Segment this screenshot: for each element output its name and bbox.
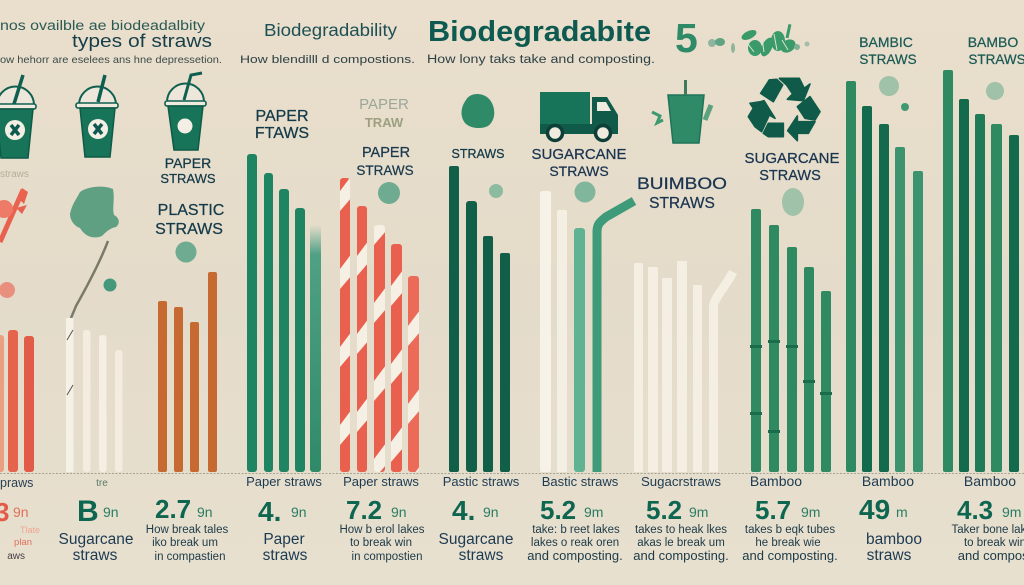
- caption: faint straws: straws: [0, 169, 29, 180]
- column 1 stats: plan: [14, 537, 32, 548]
- label: plastic straws: PLASTIC: [158, 202, 224, 219]
- column 2 stats: [59, 478, 133, 564]
- label: sugarcane straws: STRAWS: [549, 163, 609, 179]
- label: paper ftaws: PAPER: [255, 108, 309, 125]
- column 9 stats: [742, 473, 838, 563]
- header: left: [0, 18, 222, 66]
- column 10 stats: bamboo: [866, 531, 922, 548]
- column 5 stats: Paper straws: [343, 474, 419, 489]
- column 8 stats: 9m: [689, 504, 708, 520]
- column 6 stats: 9n: [483, 504, 499, 520]
- column 7 stats: 9m: [584, 504, 603, 520]
- column 11 stats: 9m: [1002, 504, 1021, 520]
- number five: 5: [675, 15, 698, 61]
- label: bambic straws: STRAWS: [859, 52, 917, 67]
- label: bumboo straws: STRAWS: [649, 195, 715, 212]
- column 7 stats: 5.2: [540, 495, 576, 525]
- label: sugarcane straws: SUGARCANE: [744, 150, 840, 167]
- header: left: types of straws: [72, 31, 212, 51]
- badge: [879, 76, 899, 96]
- column 9 stats: 5.7: [755, 495, 791, 525]
- column 7 stats: take: b reet lakes: [532, 524, 620, 536]
- column 4 stats: 9n: [291, 504, 307, 520]
- main title: How lony taks take and composting.: [427, 54, 655, 66]
- column 10 stats: Bamboo: [862, 473, 914, 489]
- header: centre-left: How blendilll d compostions.: [240, 54, 415, 66]
- column 11 stats: [952, 473, 1024, 563]
- leaves decoration: [708, 24, 810, 58]
- icon: green leaf: [70, 187, 119, 237]
- header: centre-left: Biodegradability: [264, 20, 397, 40]
- badge: [986, 82, 1004, 100]
- column 10 stats: 49: [859, 494, 890, 525]
- straw group: orange: [158, 272, 217, 472]
- icon: recycling symbol: [748, 78, 820, 141]
- icon: cup 3: [165, 73, 206, 150]
- column 11 stats: 4.3: [957, 495, 993, 525]
- column 9 stats: he break wie: [755, 537, 821, 549]
- column 4 stats: Paper straws: [246, 474, 322, 489]
- column 5 stats: to break win: [350, 537, 412, 549]
- label: paper straws under cup: STRAWS: [160, 171, 216, 186]
- column 3 stats: 9n: [197, 504, 213, 520]
- icon: small leaf: [104, 278, 116, 292]
- column 10 stats: straws: [867, 547, 912, 564]
- straw group: green: [247, 154, 321, 472]
- column 8 stats: and composting.: [633, 548, 729, 563]
- column 2 stats: tre: [96, 478, 108, 489]
- column 4 stats: straws: [263, 547, 308, 564]
- column 6 stats: Pastic straws: [443, 474, 520, 489]
- icon: green pot: [462, 94, 494, 128]
- column 7 stats: Bastic straws: [542, 474, 619, 489]
- label: bumboo straws: BUIMBOO: [637, 175, 727, 193]
- column 7 stats: lakes o reak oren: [531, 537, 619, 549]
- column 4 stats: 4.: [258, 496, 281, 527]
- label: paper straws: PAPER: [362, 145, 410, 161]
- column 9 stats: takes b eqk tubes: [745, 524, 835, 536]
- label: paper ftaws: FTAWS: [255, 125, 309, 142]
- icon: compost cup: [652, 80, 711, 143]
- label: paper straw faded: TRAW: [365, 115, 404, 130]
- straw group: white with bends: [634, 261, 733, 472]
- main title: Biodegradabite: [428, 16, 651, 48]
- label: plastic straws: STRAWS: [155, 221, 223, 238]
- column 7 stats: [527, 474, 623, 563]
- column 4 stats: Paper: [263, 531, 305, 548]
- column 5 stats: in compostien: [352, 551, 422, 563]
- column 8 stats: Sugacrstraws: [641, 474, 722, 489]
- label: bambic straws: BAMBIC: [859, 34, 913, 50]
- column 2 stats: straws: [73, 547, 118, 564]
- badge: [782, 188, 804, 216]
- label: paper straws: STRAWS: [356, 163, 414, 178]
- column 1 stats: praws: [0, 476, 33, 490]
- small leaf: [901, 103, 909, 111]
- column 6 stats: straws: [459, 547, 504, 564]
- icon: cup 1: [0, 75, 36, 158]
- column 3 stats: [146, 494, 228, 563]
- badge: [489, 184, 503, 198]
- column 4 stats: [246, 474, 322, 564]
- icon: cup 2: [76, 75, 118, 157]
- badge: [574, 182, 596, 202]
- column 10 stats: [859, 473, 922, 564]
- label: bamboo straws: BAMBO: [968, 34, 1018, 50]
- column 8 stats: 5.2: [646, 495, 682, 525]
- column 7 stats: and composting.: [527, 548, 623, 563]
- main title: [427, 16, 655, 66]
- label: sugarcane straws: SUGARCANE: [531, 146, 627, 163]
- column 3 stats: in compastien: [155, 551, 225, 563]
- column 10 stats: m: [896, 504, 908, 520]
- straw group: bamboo: [750, 209, 832, 472]
- straw group: red: [0, 330, 34, 472]
- column 3 stats: How break tales: [146, 524, 228, 536]
- column 8 stats: takes to heak lkes: [635, 524, 727, 536]
- icon: delivery truck: [540, 92, 618, 140]
- column 9 stats: and composting.: [742, 548, 838, 563]
- label: bamboo straws: STRAWS: [968, 52, 1024, 67]
- label: sugarcane straws: STRAWS: [759, 168, 821, 184]
- label: paper straw faded: PAPER: [359, 96, 409, 113]
- straw group: green tallest: [943, 70, 1019, 472]
- column 6 stats: [439, 474, 520, 564]
- header: left: ow hehorr are eselees ans hne depressetion.: [0, 54, 222, 66]
- column 6 stats: Sugarcane: [439, 531, 513, 548]
- label: paper straws under cup: PAPER: [165, 155, 211, 171]
- column 5 stats: 9n: [391, 504, 407, 520]
- column 2 stats: B: [77, 495, 99, 528]
- column 1 stats: [0, 476, 40, 562]
- column 8 stats: akas le break um: [637, 537, 725, 549]
- column 9 stats: Bamboo: [750, 473, 802, 489]
- column 11 stats: Bamboo: [964, 473, 1016, 489]
- badge: [176, 242, 196, 262]
- header: left: nos ovailble ae biodeadalbity: [0, 18, 205, 33]
- straw group: dark green: [449, 166, 510, 472]
- column 2 stats: Sugarcane: [59, 531, 133, 548]
- badge: [378, 182, 400, 204]
- column 3 stats: iko break um: [152, 537, 218, 549]
- column 9 stats: 9m: [801, 504, 820, 520]
- straw group: green tall: [846, 81, 923, 472]
- straw group: white: [66, 241, 122, 472]
- column 1 stats: Tlate: [20, 525, 40, 535]
- column 8 stats: [633, 474, 729, 563]
- label: straws: STRAWS: [451, 147, 505, 161]
- column 5 stats: 7.2: [346, 495, 382, 525]
- straw group: white and green with bend: [540, 191, 634, 472]
- column 3 stats: 2.7: [155, 494, 191, 524]
- column 1 stats: aws: [7, 551, 25, 562]
- column 1 stats: 9n: [13, 504, 29, 520]
- column 5 stats: [339, 474, 425, 563]
- column 5 stats: How b erol lakes: [339, 524, 425, 536]
- column 6 stats: 4.: [452, 495, 475, 526]
- column 2 stats: 9n: [103, 504, 119, 520]
- icon: red bow: [0, 188, 28, 298]
- straw group: red striped: [340, 178, 419, 472]
- header: centre-left: [240, 20, 415, 66]
